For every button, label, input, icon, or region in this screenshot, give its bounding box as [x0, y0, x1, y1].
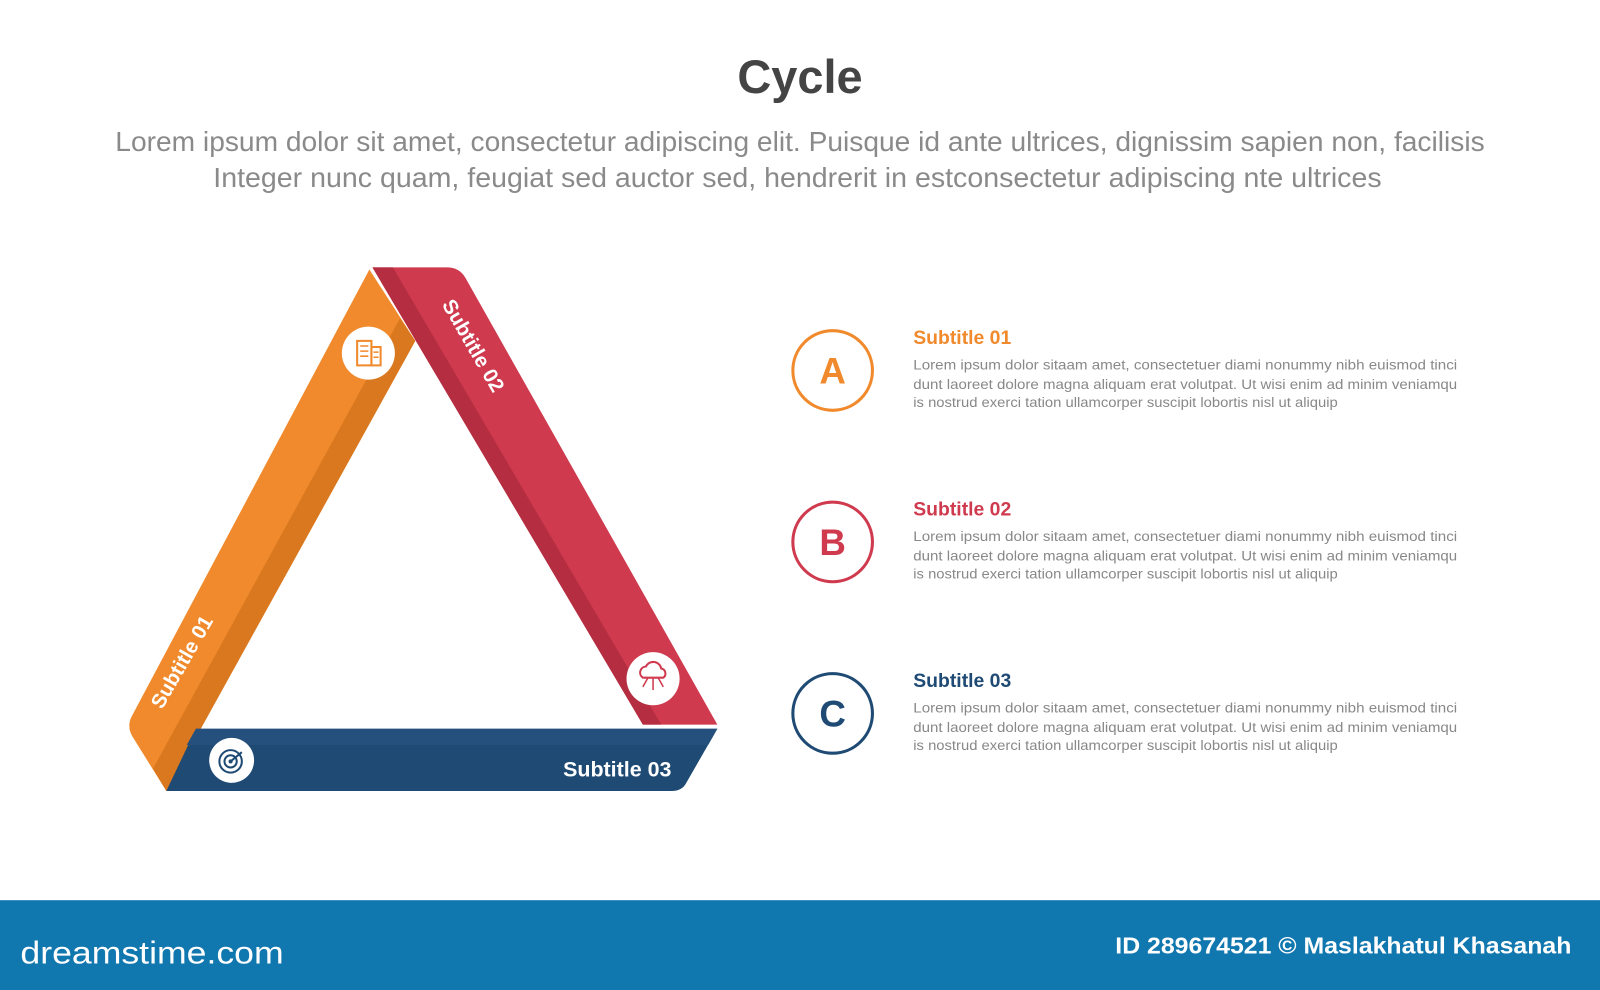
body text B: [913, 529, 1457, 583]
heading: Subtitle 01: Subtitle 01: [913, 327, 1011, 349]
band: orange subtitle 01: [129, 269, 415, 791]
body text A: Lorem ipsum dolor sitaam amet, consectetuer diami nonummy nibh euismod tinci: [913, 357, 1457, 373]
body text A: dunt laoreet dolore magna aliquam erat volutpat. Ut wisi enim ad minim veniamqu: [913, 377, 1457, 393]
title: Cycle: [737, 51, 863, 103]
body text B: Lorem ipsum dolor sitaam amet, consectetuer diami nonummy nibh euismod tinci: [913, 529, 1457, 545]
heading: Subtitle 02: Subtitle 02: [913, 498, 1011, 520]
badge C: C: [819, 694, 846, 735]
body text C: dunt laoreet dolore magna aliquam erat volutpat. Ut wisi enim ad minim veniamqu: [913, 720, 1457, 736]
body text C: [913, 700, 1457, 754]
badge A: A: [819, 351, 846, 392]
badge A: [793, 331, 872, 410]
badge B: B: [819, 522, 846, 563]
band: red subtitle 02: [372, 267, 717, 725]
description text: Integer nunc quam, feugiat sed auctor sed, hendrerit in estconsectetur adipiscing nte ultrices: [213, 162, 1382, 193]
body text B: dunt laoreet dolore magna aliquam erat volutpat. Ut wisi enim ad minim veniamqu: [913, 548, 1457, 564]
description text: [115, 126, 1485, 193]
description text: Lorem ipsum dolor sit amet, consectetur adipiscing elit. Puisque id ante ultrices, dignissim sapien non, facilisis: [115, 126, 1485, 157]
item A: [793, 327, 1457, 411]
item C: [793, 670, 1457, 754]
heading: Subtitle 03: Subtitle 03: [913, 670, 1011, 692]
icon: target: [209, 738, 254, 783]
band: red subtitle 02: Subtitle 02: [437, 296, 508, 396]
band: blue subtitle 03: Subtitle 03: [563, 758, 672, 782]
footer logo text: dreamstime.com: [20, 934, 284, 970]
badge C: [793, 674, 872, 753]
footer credit: ID 289674521 © Maslakhatul Khasanah: [1115, 932, 1571, 958]
body text A: is nostrud exerci tation ullamcorper suscipit lobortis nisl ut aliquip: [913, 395, 1338, 411]
body text A: [913, 357, 1457, 411]
icon: building: [342, 327, 395, 380]
badge B: [793, 502, 872, 582]
band: orange subtitle 01: Subtitle 01: [147, 612, 218, 713]
icon: cloud network: [627, 652, 680, 705]
triangle cycle diagram: [129, 267, 717, 791]
item B: [793, 498, 1457, 583]
body text C: is nostrud exerci tation ullamcorper suscipit lobortis nisl ut aliquip: [913, 738, 1338, 754]
footer bar: [0, 900, 1600, 990]
body text C: Lorem ipsum dolor sitaam amet, consectetuer diami nonummy nibh euismod tinci: [913, 700, 1457, 716]
body text B: is nostrud exerci tation ullamcorper suscipit lobortis nisl ut aliquip: [913, 567, 1338, 583]
band: blue subtitle 03: [166, 729, 717, 791]
